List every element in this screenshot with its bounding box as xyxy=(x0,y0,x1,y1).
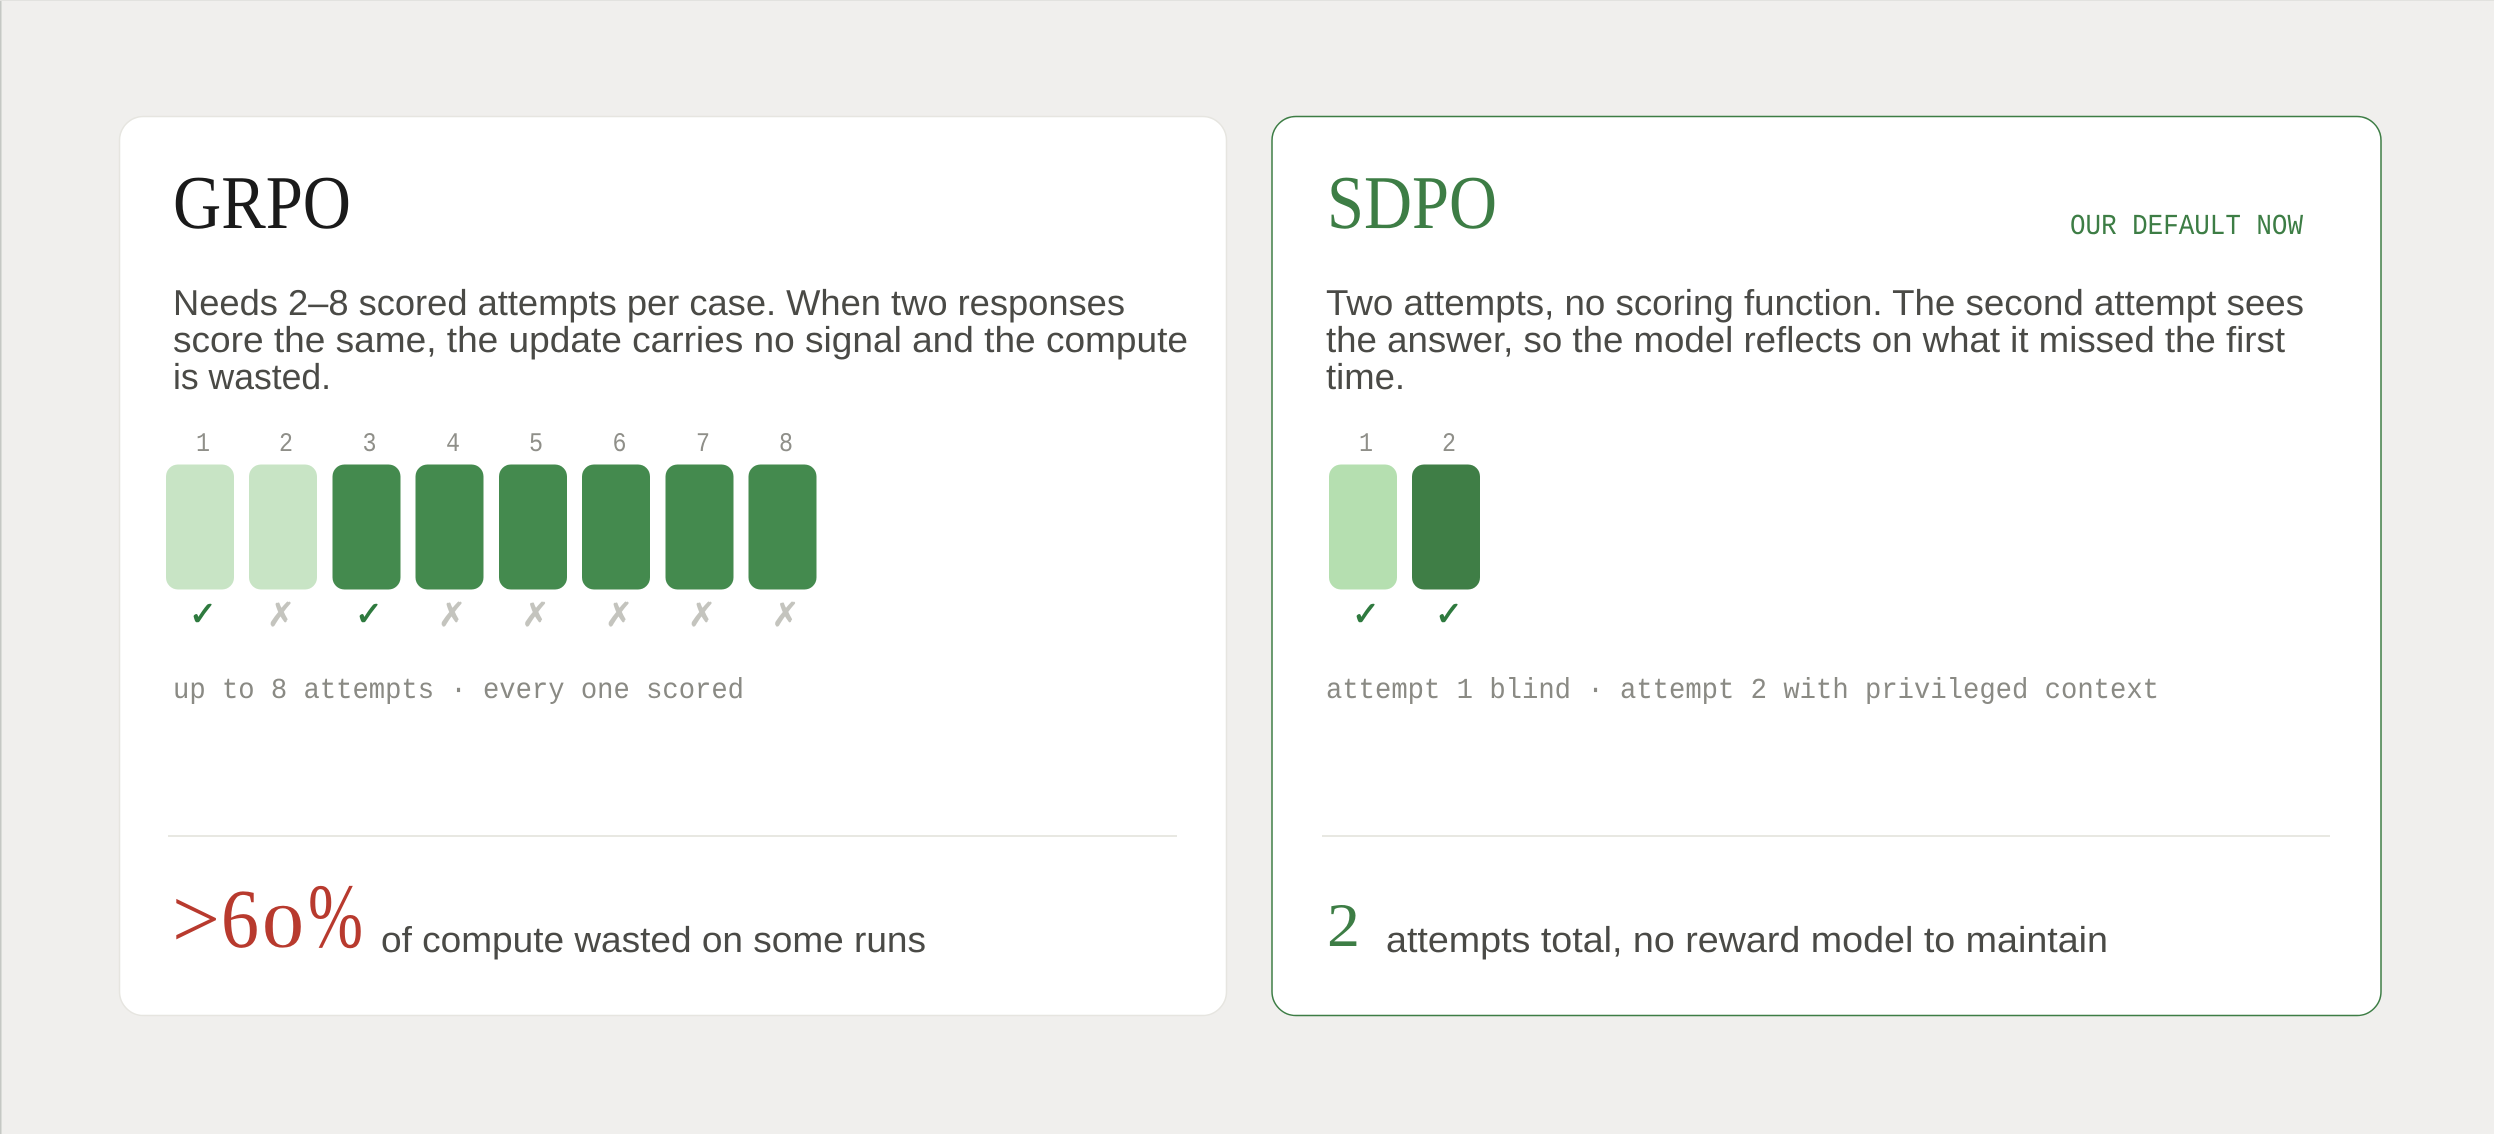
GRPO chart caption: up to 8 attempts · every one scored xyxy=(173,674,744,707)
GRPO attempt chart: eight attempts: 1 xyxy=(196,430,210,460)
SDPO attempt chart: two attempts: ✓ xyxy=(1352,594,1380,633)
GRPO stat: over 60 percent: 0 xyxy=(262,893,304,961)
SDPO attempt chart: two attempts: 2 xyxy=(1442,430,1456,460)
GRPO stat: over 60 percent: % xyxy=(308,865,363,967)
GRPO card background xyxy=(120,116,1226,1016)
GRPO attempt chart: eight attempts: 3 xyxy=(362,430,376,460)
SDPO attempt chart: two attempts xyxy=(1329,430,1480,633)
GRPO attempt chart: eight attempts: ✗ xyxy=(772,595,799,634)
GRPO attempt chart: eight attempts: 8 xyxy=(779,430,793,460)
SDPO attempt chart: two attempts: ✓ xyxy=(1435,594,1463,633)
GRPO attempt chart: eight attempts: 4 xyxy=(446,430,460,460)
SDPO stat: 2: 2 xyxy=(1327,892,1360,960)
SDPO description xyxy=(1326,282,2304,397)
SDPO chart caption: attempt 1 blind · attempt 2 with privileged context xyxy=(1326,674,2159,707)
GRPO description xyxy=(173,282,1188,397)
SDPO heading: SDPO xyxy=(1327,161,1497,245)
badge: our default now: OUR DEFAULT NOW xyxy=(2070,210,2304,243)
GRPO attempt chart: eight attempts: ✓ xyxy=(355,594,383,633)
GRPO stat: over 60 percent: 6 xyxy=(221,873,259,966)
GRPO attempt chart: eight attempts: ✓ xyxy=(189,594,217,633)
GRPO stat description: of compute wasted on some runs xyxy=(381,919,926,960)
SDPO card background xyxy=(1272,116,2381,1016)
GRPO description: is wasted. xyxy=(173,356,331,397)
GRPO attempt chart: eight attempts xyxy=(166,430,816,634)
GRPO attempt chart: eight attempts: 5 xyxy=(529,430,543,460)
GRPO attempt chart: eight attempts: 6 xyxy=(612,430,626,460)
SDPO description: the answer, so the model reflects on what it missed the first xyxy=(1326,319,2285,360)
panel: GRPO xyxy=(120,116,1226,1016)
SDPO stat description: attempts total, no reward model to maintain xyxy=(1386,919,2108,960)
panel: SDPO xyxy=(1272,116,2381,1016)
GRPO attempt chart: eight attempts: ✗ xyxy=(267,595,295,634)
SDPO description: time. xyxy=(1326,356,1405,397)
GRPO attempt chart: eight attempts: 7 xyxy=(696,430,710,460)
GRPO stat: over 60 percent: > xyxy=(172,873,220,966)
GRPO description: Needs 2–8 scored attempts per case. When two responses xyxy=(173,282,1125,323)
GRPO attempt chart: eight attempts: ✗ xyxy=(522,595,549,634)
GRPO attempt chart: eight attempts: ✗ xyxy=(688,595,716,634)
GRPO description: score the same, the update carries no signal and the compute xyxy=(173,319,1188,360)
SDPO description: Two attempts, no scoring function. The second attempt sees xyxy=(1326,282,2304,323)
GRPO heading: GRPO xyxy=(173,161,351,245)
GRPO attempt chart: eight attempts: 2 xyxy=(279,430,293,460)
SDPO attempt chart: two attempts: 1 xyxy=(1359,430,1373,460)
GRPO attempt chart: eight attempts: ✗ xyxy=(605,595,633,634)
GRPO stat: over 60 percent xyxy=(172,865,363,967)
GRPO attempt chart: eight attempts: ✗ xyxy=(438,595,466,634)
